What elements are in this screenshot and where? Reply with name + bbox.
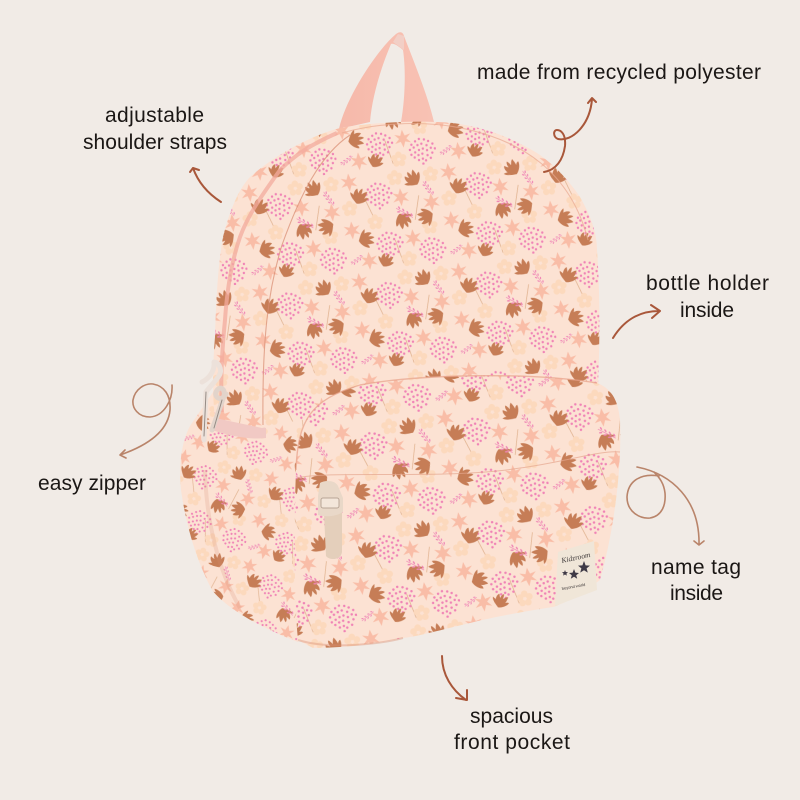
label: bottle holder: [646, 272, 769, 295]
brand tagline: beyond world: [561, 582, 586, 591]
backpack illustration: [180, 32, 620, 648]
brand label: [555, 541, 597, 606]
arrow: [442, 656, 467, 700]
label: shoulder straps: [83, 131, 227, 154]
arrow: [120, 384, 172, 458]
zipper pull: [202, 362, 226, 440]
top carry handle: [339, 32, 434, 129]
arrow: [544, 98, 596, 172]
label: inside: [680, 299, 734, 322]
label: adjustable: [105, 104, 204, 127]
label: inside: [670, 582, 723, 605]
callout: name tag inside: [627, 467, 741, 605]
arrow: [613, 305, 660, 338]
callout: bottle holder inside: [613, 272, 769, 338]
label: [454, 705, 570, 754]
callout: spacious front pocket: [442, 656, 570, 754]
label: name tag: [651, 556, 741, 579]
callout: easy zipper: [38, 384, 172, 495]
callout: adjustable shoulder straps: [83, 104, 227, 202]
label: [646, 272, 769, 322]
label: easy zipper: [38, 472, 146, 495]
label: made from recycled polyester: [477, 61, 761, 84]
brand stars: [562, 561, 590, 579]
front pocket buckle: [318, 481, 343, 559]
brand name: Kidzroom: [560, 550, 592, 565]
arrow: [190, 168, 221, 202]
main body: [213, 122, 599, 428]
label: spacious: [470, 705, 553, 728]
callout: recycled polyester: [477, 61, 761, 172]
arrow: [627, 467, 704, 545]
label: [83, 104, 227, 154]
side panel with mesh pocket: [180, 370, 330, 642]
front pocket: [295, 376, 620, 648]
label: [651, 556, 741, 605]
label: front pocket: [454, 731, 570, 754]
